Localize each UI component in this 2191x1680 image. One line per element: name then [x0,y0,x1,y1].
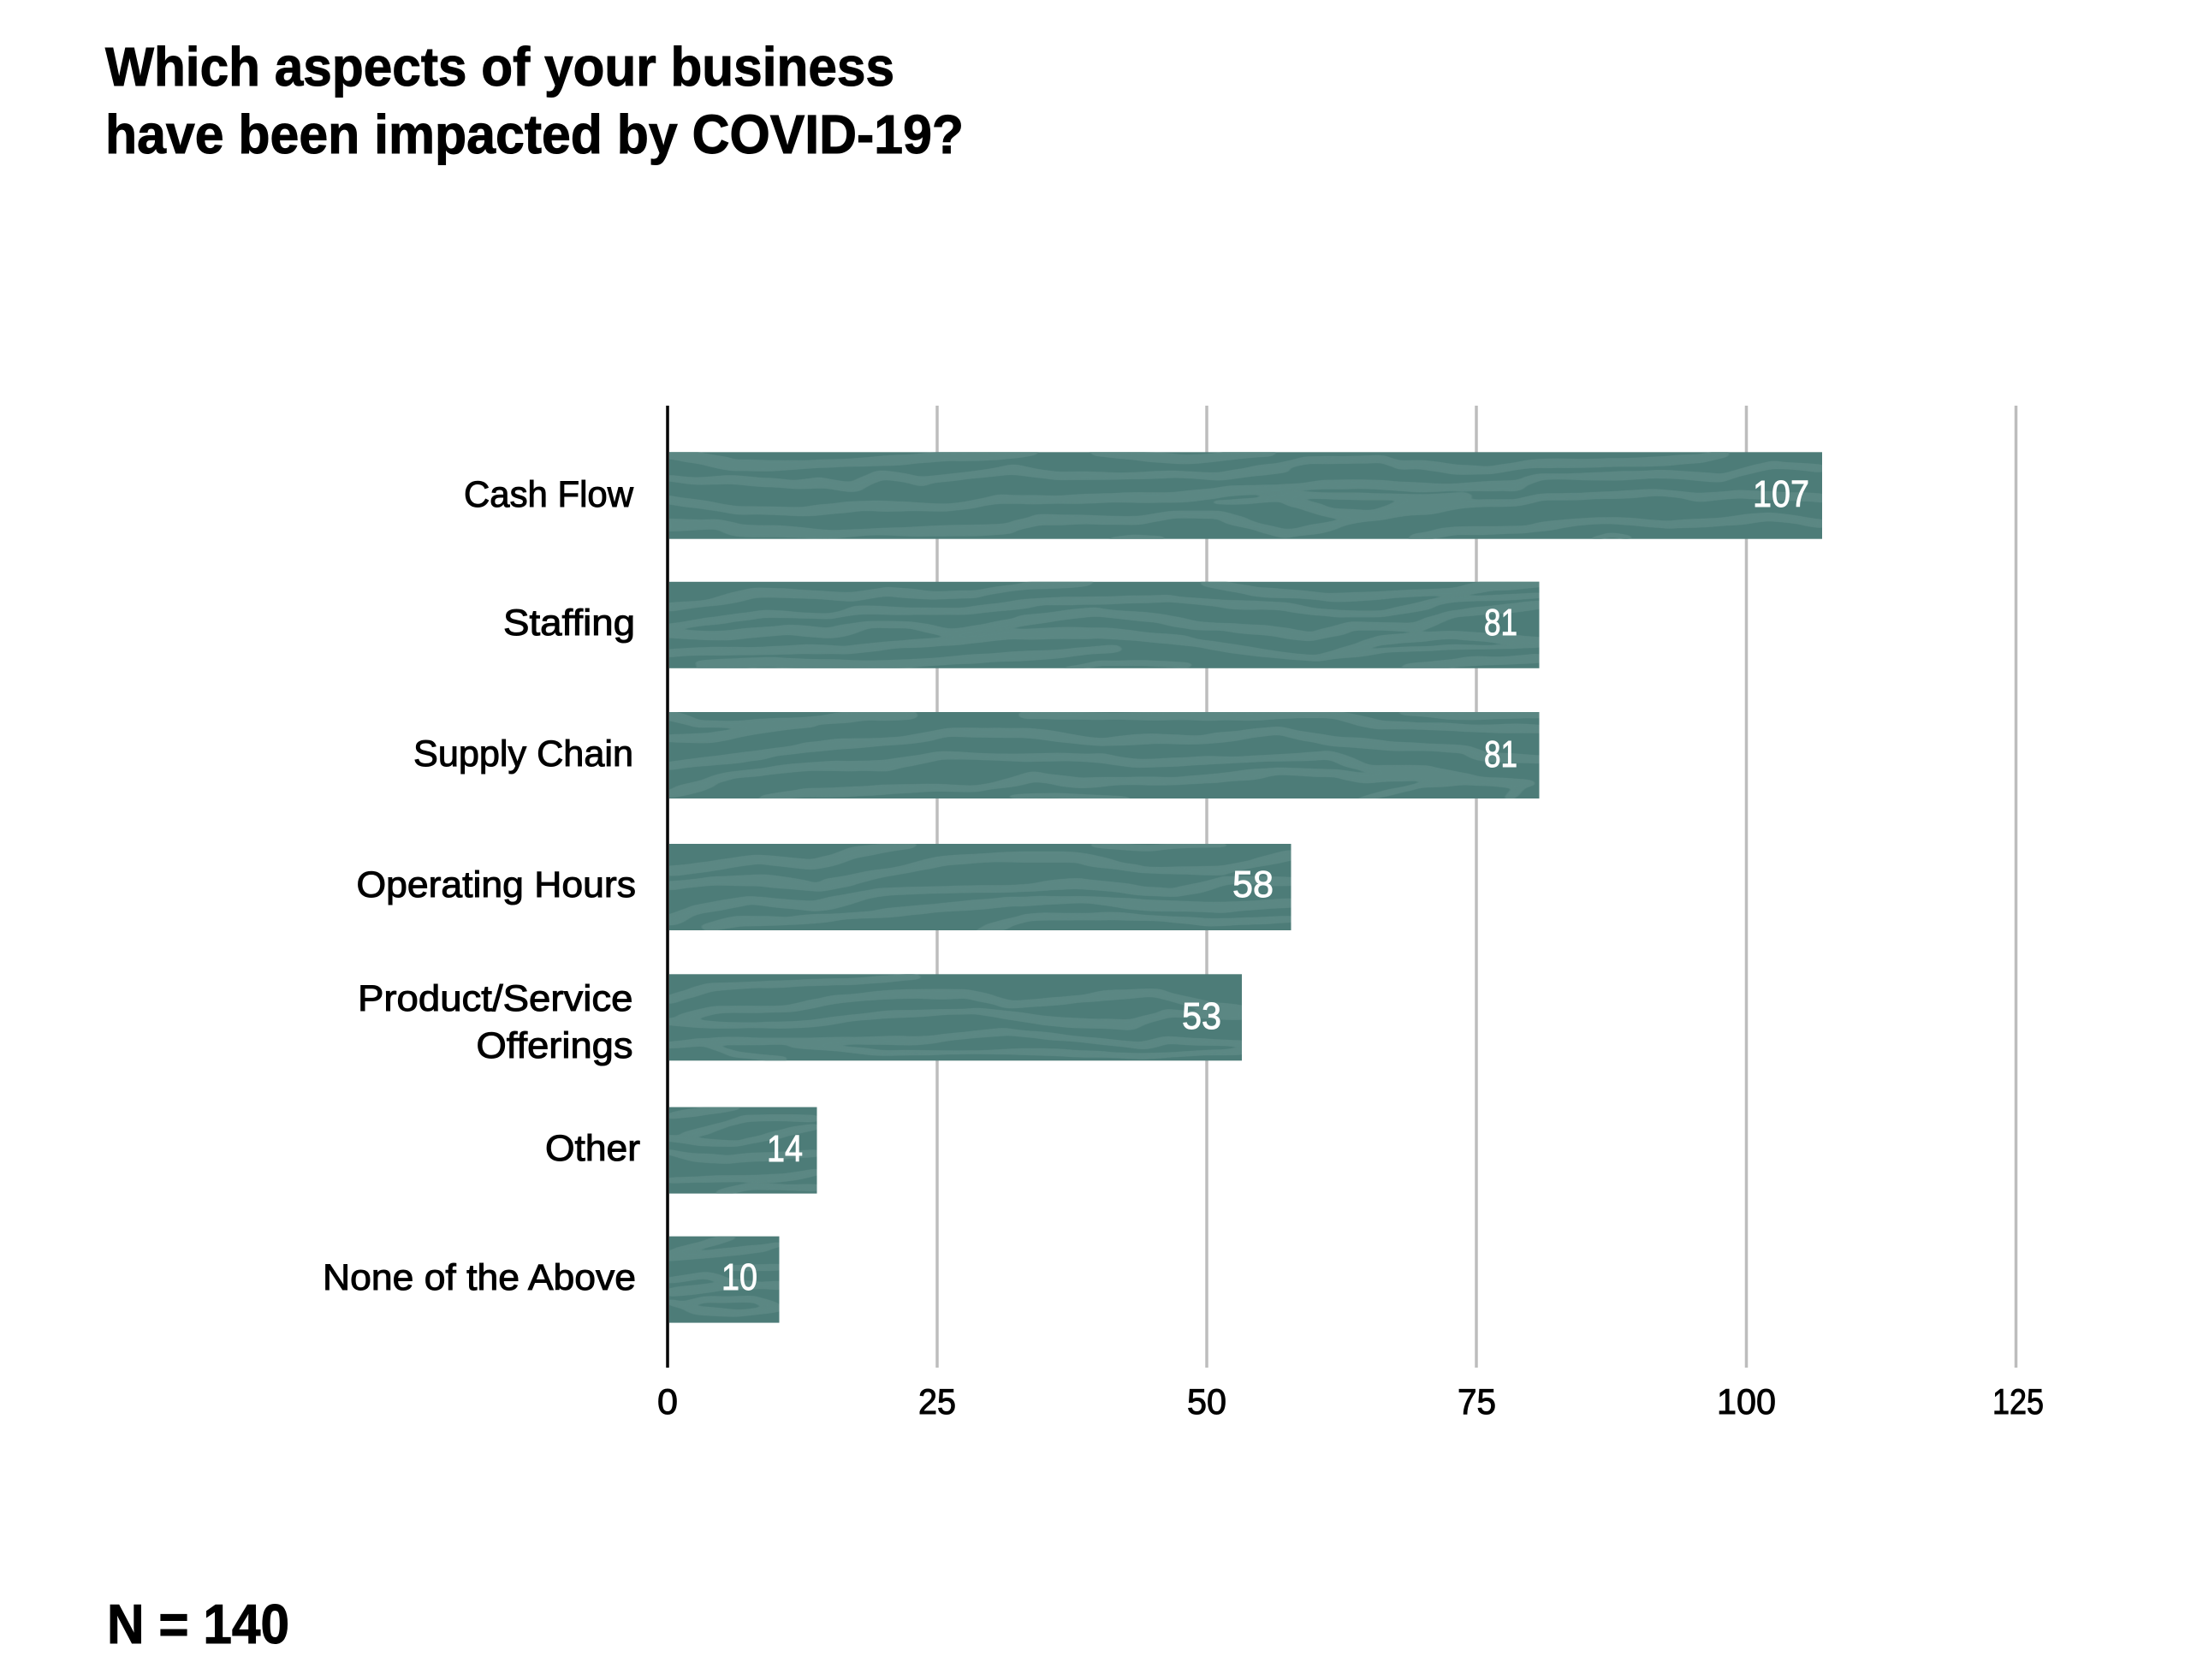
x-axis tick labels: 25 [918,1381,956,1422]
bar: Product/Service Offerings 53 [669,974,1242,1060]
category labels: Cash Flow [464,474,634,515]
gridlines [937,406,2016,1368]
value label: 81 [1484,602,1517,644]
category labels: Staffing [503,603,635,644]
category labels: Offerings [476,1025,633,1066]
axis line [666,406,669,1368]
x-axis tick labels: 125 [1992,1381,2044,1422]
value label: 58 [1232,864,1274,905]
category labels: Product/Service [358,978,633,1019]
x-axis tick labels [657,1381,2044,1422]
bar: Supply Chain 81 [669,712,1539,798]
x-axis tick labels: 75 [1458,1381,1496,1422]
value label: 107 [1753,473,1809,515]
bar: None of the Above 10 [668,1237,779,1323]
value label: 10 [721,1256,757,1298]
title: have been impacted by COVID-19? [105,104,964,165]
category labels: Supply Chain [413,733,633,775]
value label: 53 [1182,995,1221,1037]
category labels [323,474,640,1298]
value label: 14 [767,1128,803,1170]
bar: Operating Hours 58 [669,844,1291,930]
x-axis tick labels: 100 [1717,1381,1776,1422]
chart: horizontal bar chart [323,406,2044,1422]
sample size note: N = 140 [107,1593,289,1655]
category labels: None of the Above [323,1257,636,1298]
value label: 81 [1484,733,1517,775]
x-axis tick labels: 0 [657,1381,678,1422]
bar: Cash Flow 107 [668,452,1822,539]
x-axis tick labels: 50 [1187,1381,1226,1422]
category labels: Other [545,1128,640,1169]
title: Which aspects of your business [105,36,894,98]
bar: Other 14 [668,1107,816,1194]
bar: Staffing 81 [669,582,1539,668]
category labels: Operating Hours [356,864,636,905]
title [105,36,964,165]
